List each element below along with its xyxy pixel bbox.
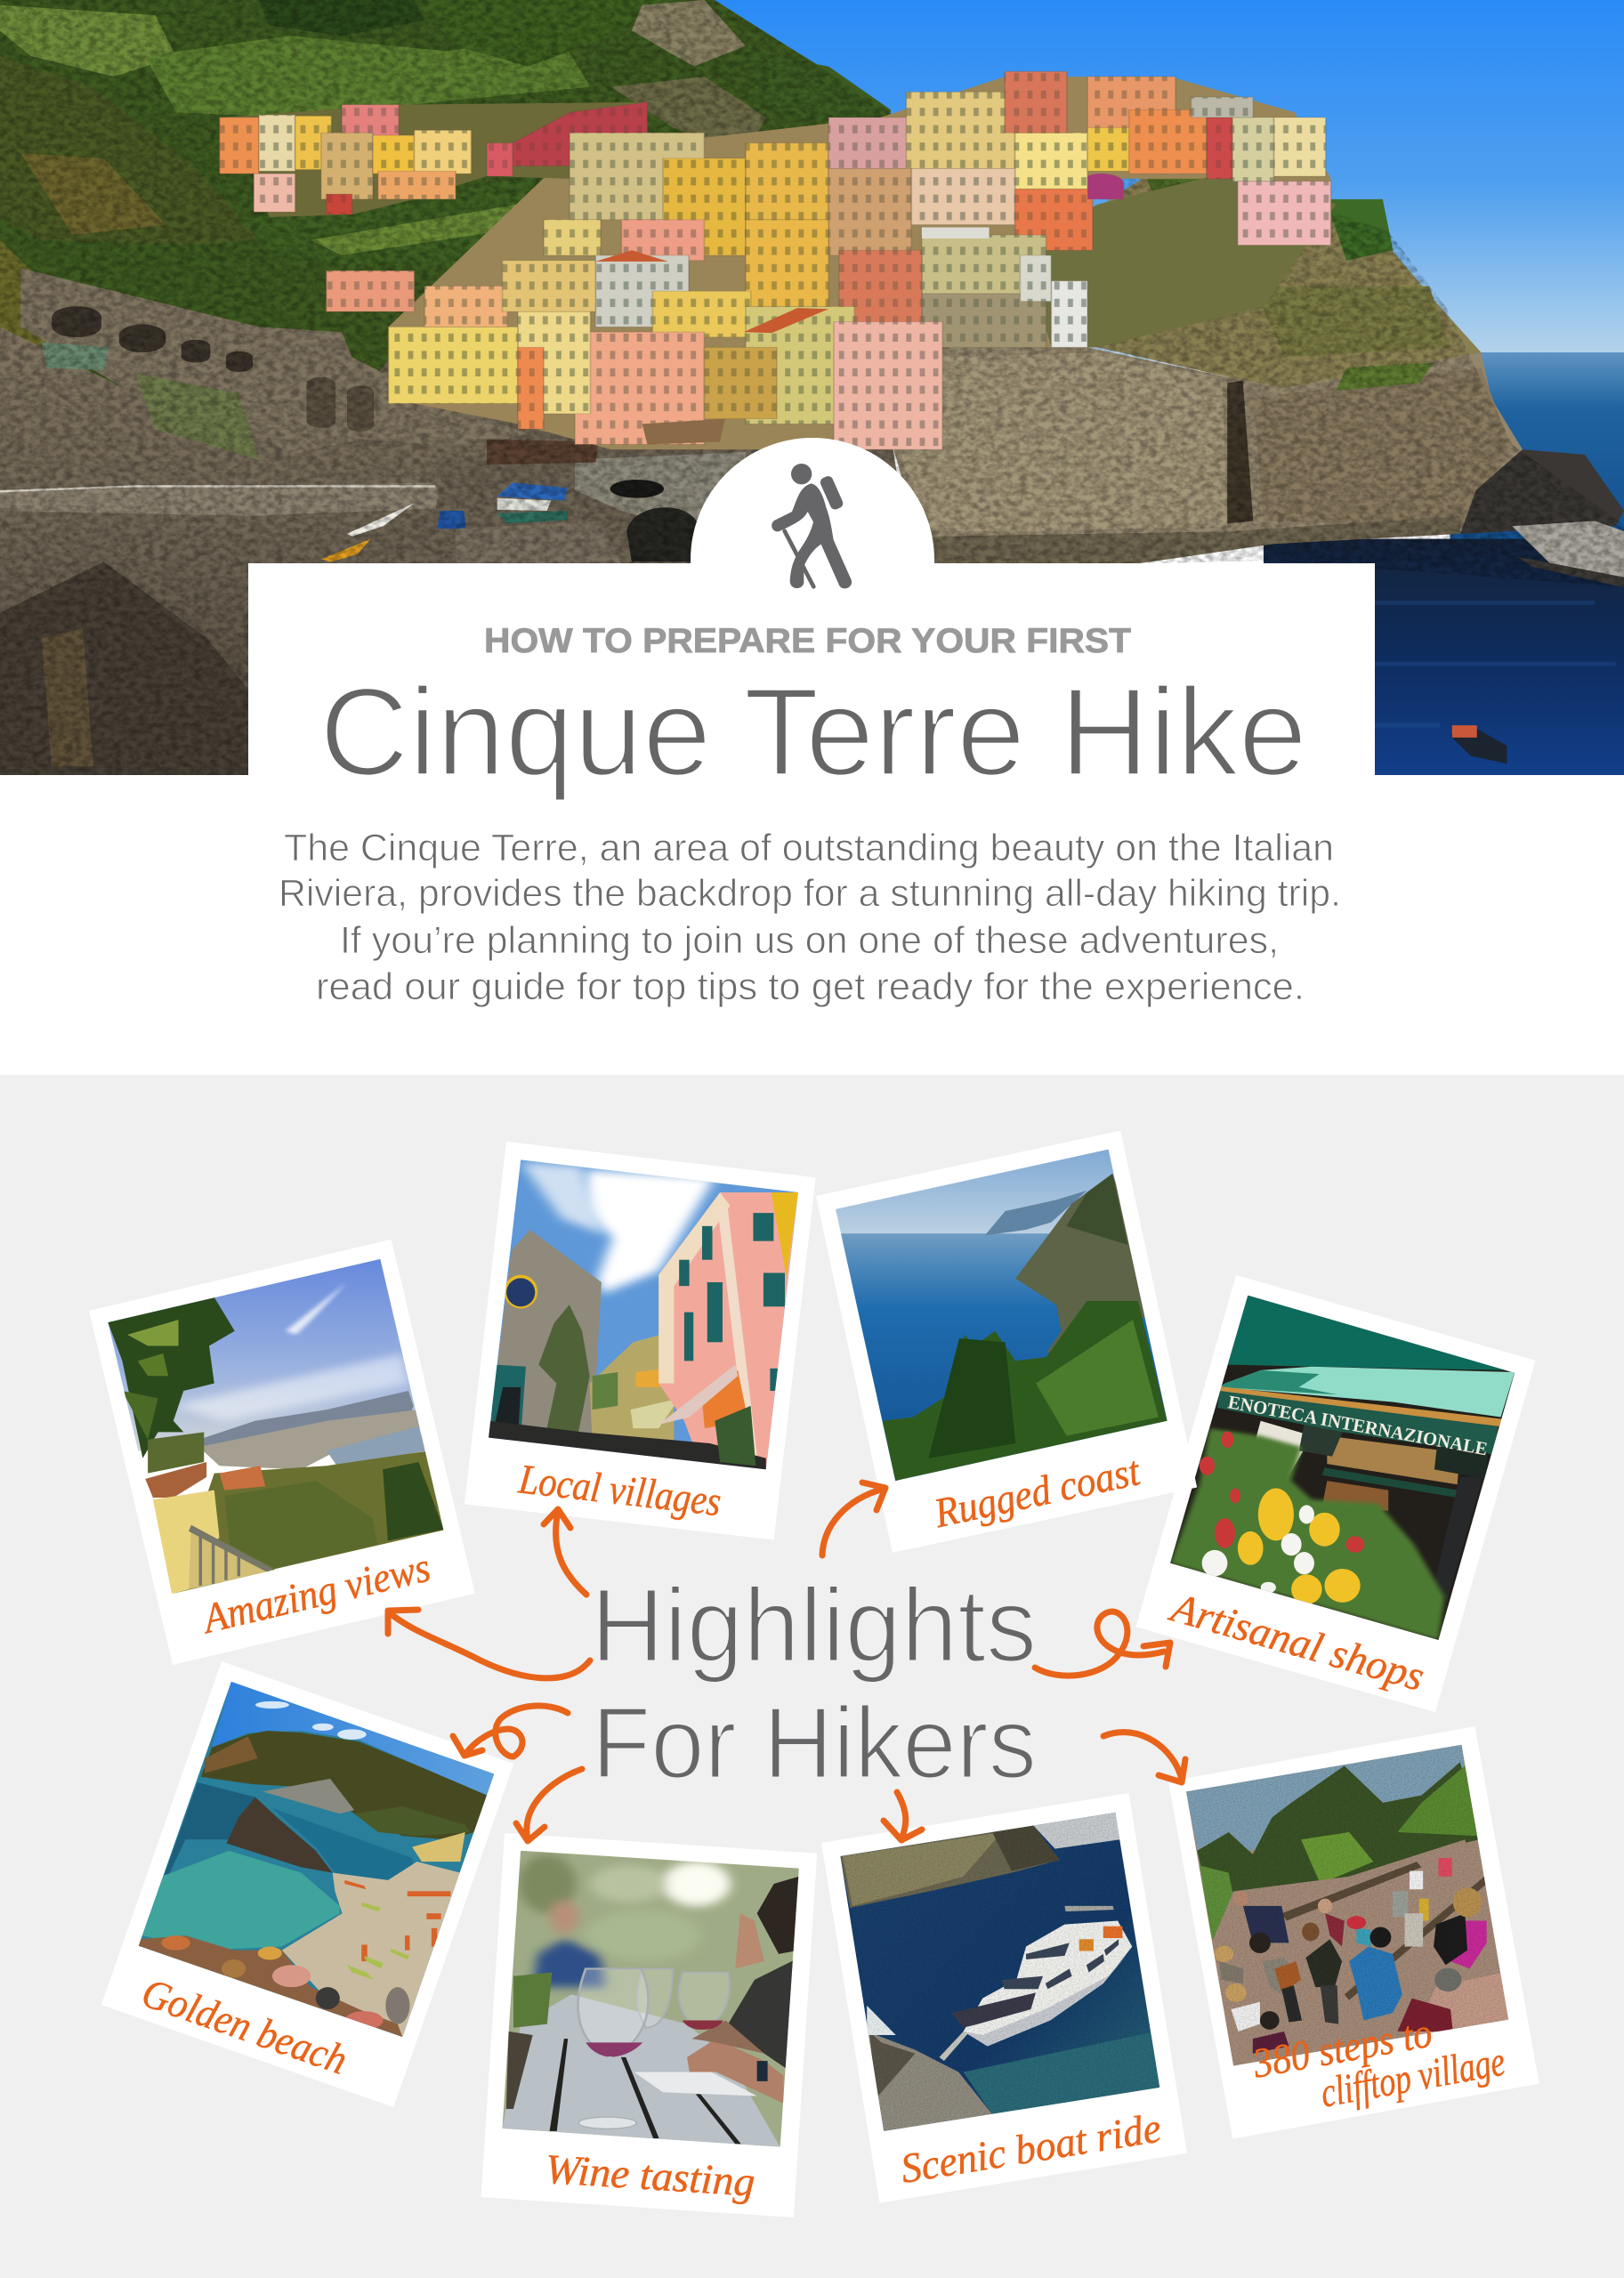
photo: enoteca shop with flowers [1170,1296,1515,1640]
polaroid: Golden beach [101,1661,513,2107]
card body [248,563,1375,777]
polaroid: Local villages [465,1142,816,1540]
hero photo: Manarola village on the cliff [0,0,1624,779]
section heading: Highlights [591,1567,1037,1684]
intro paragraph: The Cinque Terre, an area of outstanding beauty on the Italian [284,827,1334,869]
caption: Amazing views [197,1544,434,1643]
shop sign text: ENOTECA INTERNAZIONALE [1226,1391,1490,1459]
polaroid: Scenic boat ride [821,1793,1187,2203]
colourful town buildings [220,71,1331,449]
photo: coast and cliffs [831,1147,1168,1484]
photo: Monterosso beach [133,1677,504,2039]
caption: Local villages [516,1456,723,1525]
subtitle: HOW TO PREPARE FOR YOUR FIRST [484,622,1131,660]
arrow: to Amazing views [388,1610,590,1678]
arrow: to Golden beach [453,1706,568,1757]
section heading: For Hikers [592,1687,1037,1800]
polaroid: Artisanal shops [1135,1275,1536,1712]
card arch [691,438,934,563]
intro paragraph: Riviera, provides the backdrop for a stunning all-day hiking trip. [279,872,1341,915]
caption: Artisanal shops [1164,1584,1429,1700]
intro paragraph: read our guide for top tips to get ready for the experience. [316,965,1305,1008]
polaroid: 380 steps to clifftop village [1168,1726,1539,2139]
polaroid: Rugged coast [816,1131,1197,1553]
photo: white boat at the rocks [838,1810,1166,2135]
section heading [591,1567,1037,1800]
title card [248,438,1375,802]
intro paragraph [279,827,1341,1008]
arrow: to Rugged coast [822,1482,885,1555]
arrow: to Local villages [544,1509,586,1595]
caption: Golden beach [136,1969,353,2084]
highlights section background [0,1075,1624,2278]
arrow: to Artisanal shops [1035,1612,1170,1676]
white intro block below hero [0,775,1624,1075]
photo: wine glasses on table [499,1847,803,2153]
icon: hiker [772,464,852,588]
title: Cinque Terre Hike [319,661,1307,802]
polaroid: Wine tasting [481,1833,817,2217]
intro paragraph: If you’re planning to join us on one of these adventures, [340,919,1279,962]
caption: Scenic boat ride [898,2105,1164,2193]
arrow: to Scenic boat ride [884,1792,922,1840]
photo: bay view from terrace [101,1256,449,1594]
polaroid: Amazing views [89,1240,475,1665]
arrow: to Wine tasting [516,1769,582,1841]
arrow: to 380 steps [1103,1733,1185,1782]
caption: clifftop village [1317,2039,1508,2117]
caption: 380 steps to [1248,2010,1435,2088]
caption: Wine tasting [544,2146,756,2206]
caption [1248,1998,1508,2128]
photo: crowd of hikers on stairs [1183,1744,1511,2068]
photo: village church and pink house [480,1155,807,1477]
caption: Rugged coast [930,1448,1144,1537]
